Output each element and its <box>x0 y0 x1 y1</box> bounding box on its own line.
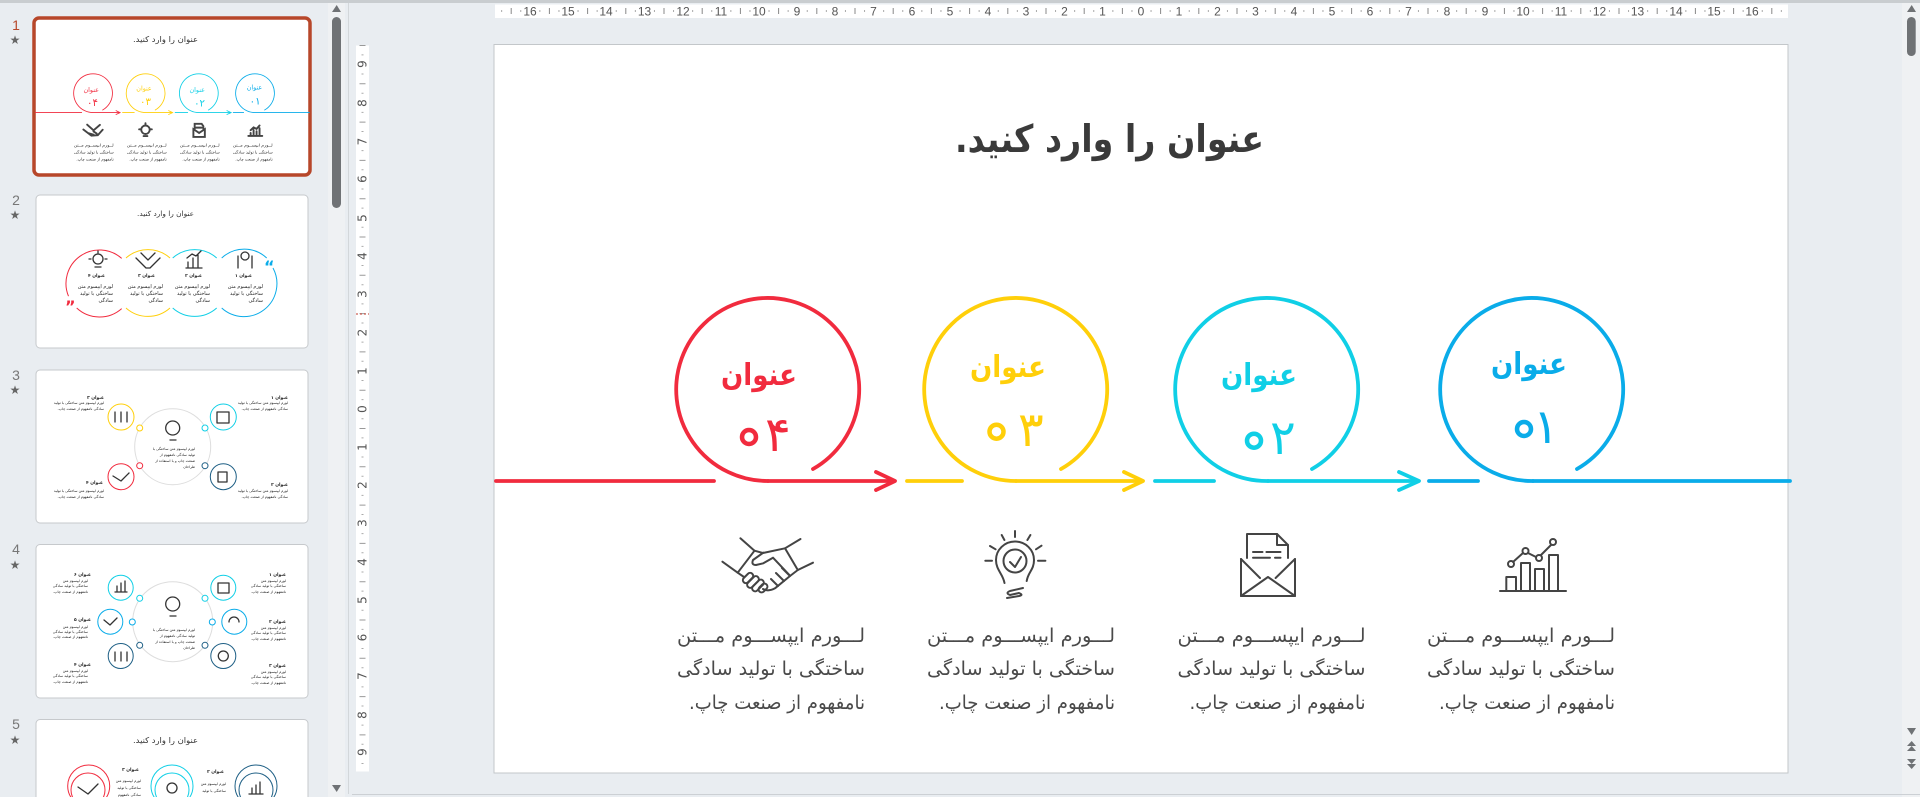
step 2 timeline: cyan circle and arrow <box>1155 298 1419 490</box>
thumbnail number and star 1: 1 <box>12 17 20 33</box>
thumbnail 5: لورم ایپسوم متن <box>116 779 141 784</box>
vertical ruler: 5 <box>356 596 370 604</box>
step 4 number: ۰۴ <box>742 407 791 463</box>
thumbnail 4: لورم ایپسوم متن <box>63 625 88 630</box>
panel: slide thumbnails <box>10 17 310 797</box>
thumbnail 1: ۰۲ <box>194 99 205 110</box>
horizontal ruler: 12 <box>1593 4 1606 18</box>
horizontal ruler: 1 <box>1176 4 1183 18</box>
thumbnail 3: سادگی نامفهوم از صنعت چاپ. <box>57 494 104 500</box>
step 1 heading: عنوان <box>1491 347 1567 382</box>
horizontal ruler: 12 <box>676 4 690 18</box>
step 2 heading: عنوان <box>1221 358 1297 393</box>
vertical ruler: 3 <box>356 519 370 527</box>
thumbnail 2: ” <box>65 297 76 316</box>
step 1 body text: لـــورم ایپســـوم مـــتن <box>1427 625 1615 647</box>
vertical ruler: 6 <box>356 175 370 183</box>
thumbnail 1: لــورم ایپســوم مــتن <box>127 142 167 147</box>
horizontal ruler: 10 <box>1516 4 1530 18</box>
thumbnail 4: عنوان ۳ <box>269 663 286 669</box>
horizontal ruler: 16 <box>1745 4 1759 18</box>
thumbnail 3: عنوان ۴ <box>86 481 103 486</box>
step 3 timeline: yellow circle and arrow <box>907 298 1143 490</box>
step 1 number: ۰۱ <box>1517 399 1559 455</box>
horizontal ruler: 3 <box>1023 4 1030 18</box>
vertical ruler: 9 <box>356 60 370 68</box>
thumbnail 1: نامفهوم از صنعت چاپ. <box>235 156 273 161</box>
thumbnail 1: عنوان را وارد کنید. <box>133 35 198 44</box>
thumbnail 1: ۰۱ <box>250 96 261 107</box>
thumbnail number and star 2: ★ <box>10 208 20 222</box>
vertical ruler: 3 <box>356 290 370 298</box>
thumbnail 1: لــورم ایپســوم مــتن <box>74 142 114 147</box>
thumbnail 4: نامفهوم از صنعت چاپ. <box>53 590 88 595</box>
thumbnail 2: لورم ایپسوم متن <box>128 284 163 290</box>
thumbnail 4: نامفهوم از صنعت چاپ. <box>53 635 88 640</box>
thumbnail 3: عنوان ۳ <box>87 395 104 401</box>
thumbnail 4: طراحان <box>183 646 195 650</box>
thumbnail 1: ساختگی با تولید سادگی <box>74 149 114 154</box>
thumbnail number and star 3 <box>10 367 20 397</box>
step 4 body text: لـــورم ایپســـوم مـــتن <box>677 625 865 647</box>
horizontal ruler: 14 <box>599 4 613 18</box>
step 3 body text: ساختگی با تولید سادگی <box>927 657 1115 680</box>
thumbnail 3: عنوان ۲ <box>271 483 288 488</box>
thumbnail 2: عنوان ۲ <box>185 274 202 279</box>
horizontal ruler: 13 <box>638 4 651 18</box>
thumbnail 2: لورم ایپسوم متن <box>175 284 210 290</box>
thumbnail 4: نامفهوم از صنعت چاپ. <box>251 681 286 686</box>
thumbnail 1: عنوان <box>136 85 152 92</box>
thumbnail 5: ساختگی با تولید <box>117 785 141 790</box>
thumbnail 4: ساختگی با تولید سادگی <box>53 629 88 634</box>
step 3 heading: عنوان <box>970 350 1046 385</box>
thumbnail 4: عنوان ۶ <box>74 573 91 578</box>
thumbnail 4: ساختگی با تولید سادگی <box>251 583 286 588</box>
thumbnail 4: تولید سادگی نامفهوم از <box>159 633 195 639</box>
thumbnail 4: لورم ایپسوم متن <box>261 670 286 675</box>
thumbnail 2: سادگی <box>98 297 113 304</box>
horizontal ruler: 2 <box>1061 4 1068 18</box>
vertical ruler: 9 <box>356 748 370 756</box>
thumbnail 1: ساختگی با تولید سادگی <box>233 149 273 154</box>
thumbnail 4: لورم ایپسوم متن <box>63 669 88 674</box>
horizontal ruler: 14 <box>1669 4 1683 18</box>
horizontal ruler: 7 <box>870 4 877 18</box>
thumbnail 3: لورم ایپسوم متن ساختگی با تولید <box>238 400 288 406</box>
icon: envelope with document <box>1241 534 1295 596</box>
vertical ruler: 0 <box>356 405 370 413</box>
thumbnail 2 <box>36 195 308 348</box>
thumbnail 4: نامفهوم از صنعت چاپ. <box>53 680 88 685</box>
thumbnail 4: عنوان ۲ <box>269 620 286 625</box>
thumbnail 5: عنوان را وارد کنید. <box>133 736 198 745</box>
thumbnail 5: عنوان ۳ <box>122 767 139 773</box>
thumbnail number and star 5: ★ <box>10 733 20 747</box>
thumbnail 3: لورم ایپسوم متن ساختگی با تولید <box>238 488 288 494</box>
thumbnail 4: ساختگی با تولید سادگی <box>251 630 286 635</box>
horizontal ruler: 5 <box>947 4 954 18</box>
thumbnail number and star 5 <box>10 716 20 747</box>
vertical ruler: 8 <box>356 711 370 719</box>
step 2 body text: نامفهوم از صنعت چاپ. <box>1190 692 1366 714</box>
thumbnail 3: سادگی نامفهوم از صنعت چاپ. <box>241 406 288 412</box>
thumbnail 1: لــورم ایپســوم مــتن <box>233 142 273 147</box>
step 3 body text: لـــورم ایپســـوم مـــتن <box>927 625 1115 647</box>
horizontal ruler: 1 <box>1099 4 1106 18</box>
thumbnail 4: لورم ایپسوم متن <box>63 579 88 584</box>
horizontal ruler: 8 <box>832 4 839 18</box>
vertical ruler: 5 <box>356 214 370 222</box>
step 3 number: ۰۳ <box>989 402 1044 458</box>
horizontal ruler: 9 <box>1482 4 1489 18</box>
icon: handshake <box>722 538 813 594</box>
step 1 timeline: blue circle and line <box>1429 298 1790 481</box>
vertical ruler: 2 <box>356 329 370 336</box>
thumbnail number and star 1: ★ <box>10 33 20 47</box>
thumbnail 2: عنوان ۳ <box>138 273 155 279</box>
thumbnail number and star 2 <box>10 192 20 222</box>
thumbnail 2: سادگی <box>196 297 210 304</box>
horizontal ruler: 15 <box>1707 4 1721 18</box>
thumbnail number and star 5: 5 <box>12 716 20 732</box>
horizontal ruler: 16 <box>523 4 537 18</box>
step 3 body text: نامفهوم از صنعت چاپ. <box>939 692 1115 714</box>
panel: main slide <box>494 44 1790 773</box>
thumbnail 1: ساختگی با تولید سادگی <box>127 149 167 154</box>
thumbnail 1: ۰۴ <box>87 98 98 109</box>
thumbnail 2: لورم ایپسوم متن <box>78 284 113 290</box>
thumbnail 1: ساختگی با تولید سادگی <box>180 149 220 154</box>
thumbnail 1: عنوان <box>189 87 205 94</box>
thumbnail 1: لــورم ایپســوم مــتن <box>180 142 220 147</box>
thumbnail 4: لورم ایپسوم متن <box>261 579 286 584</box>
thumbnail 2: عنوان ۴ <box>88 274 105 279</box>
thumbnail number and star 1 <box>10 17 20 47</box>
right scrollbar <box>1907 5 1916 769</box>
step 2 body text: ساختگی با تولید سادگی <box>1178 657 1366 680</box>
thumbnail 4: عنوان ۱ <box>269 573 286 578</box>
thumbnail 3: طراحان <box>183 465 195 469</box>
step 4 timeline: red circle and arrow <box>496 298 895 490</box>
thumbnail 3 <box>36 370 308 523</box>
thumbnail 4: لورم ایپسوم متن ساختگی با <box>153 627 195 633</box>
horizontal ruler: 4 <box>1291 4 1298 18</box>
thumbnail 5: لورم ایپسوم متن <box>201 782 226 787</box>
icon: bar and line chart <box>1500 539 1566 591</box>
horizontal ruler: 2 <box>1214 4 1221 18</box>
thumbnail 4: لورم ایپسوم متن <box>261 626 286 631</box>
thumbnail 4: ساختگی با تولید سادگی <box>53 583 88 588</box>
vertical ruler: 2 <box>356 481 370 489</box>
thumbnail number and star 4 <box>10 541 20 572</box>
step 4 body text: ساختگی با تولید سادگی <box>677 657 865 680</box>
horizontal ruler: 0 <box>1138 4 1145 18</box>
vertical ruler: 7 <box>356 672 370 680</box>
horizontal ruler: 3 <box>1252 4 1259 18</box>
horizontal ruler: 15 <box>561 4 575 18</box>
thumbnail 2: عنوان ۱ <box>235 274 252 279</box>
step 4 heading: عنوان <box>721 358 797 393</box>
thumbnail number and star 3: ★ <box>10 383 20 397</box>
step 2 body text: لـــورم ایپســـوم مـــتن <box>1178 625 1366 647</box>
thumbnail 3: عنوان ۱ <box>271 396 288 401</box>
step 2 number: ۰۲ <box>1247 410 1296 466</box>
vertical ruler: 4 <box>356 558 370 566</box>
thumbnail number and star 3: 3 <box>12 367 20 383</box>
vertical ruler: 4 <box>356 252 370 260</box>
thumbnail 2: سادگی <box>148 297 163 304</box>
title: عنوان را وارد کنید. <box>955 117 1264 162</box>
horizontal ruler: 4 <box>985 4 992 18</box>
thumbnail 1: نامفهوم از صنعت چاپ. <box>129 156 167 161</box>
thumbnail 2: ساختگی با تولید <box>130 290 163 297</box>
thumbnail 2: ساختگی با تولید <box>177 290 210 297</box>
thumbnail 3: تولید سادگی نامفهوم از <box>159 452 195 458</box>
thumbnail 2: لورم ایپسوم متن <box>228 284 263 290</box>
step 1 body text <box>1427 625 1615 714</box>
thumbnail 1: عنوان <box>83 87 99 94</box>
left scrollbar <box>332 5 341 792</box>
icon: light bulb <box>985 531 1045 598</box>
thumbnail 4: نامفهوم از صنعت چاپ. <box>251 637 286 642</box>
thumbnail 4: عنوان ۴ <box>74 663 91 668</box>
thumbnail 4 <box>36 544 308 698</box>
thumbnail number and star 4: 4 <box>12 541 20 557</box>
horizontal ruler: 6 <box>909 4 916 18</box>
horizontal ruler: 11 <box>1555 4 1568 18</box>
thumbnail 4: نامفهوم از صنعت چاپ. <box>251 590 286 595</box>
horizontal ruler: 5 <box>1329 4 1336 18</box>
thumbnail 3: صنعت چاپ و با استفاده از <box>154 459 195 463</box>
thumbnail 1: عنوان <box>247 85 262 92</box>
thumbnail 1: نامفهوم از صنعت چاپ. <box>182 156 220 161</box>
thumbnail 1: ۰۳ <box>140 97 151 108</box>
thumbnail 4: صنعت چاپ و با استفاده از <box>154 640 195 644</box>
vertical ruler: 8 <box>356 99 370 107</box>
thumbnail 2: سادگی <box>248 297 263 304</box>
thumbnail 2: ساختگی با تولید <box>80 290 113 297</box>
thumbnail 5 <box>36 720 308 797</box>
vertical ruler: 1 <box>356 443 370 451</box>
thumbnail 3: سادگی نامفهوم از صنعت چاپ. <box>241 494 288 500</box>
horizontal ruler: 10 <box>752 4 766 18</box>
horizontal ruler <box>495 4 1788 18</box>
horizontal ruler: 13 <box>1631 4 1644 18</box>
thumbnail 5: عنوان ۲ <box>207 770 224 775</box>
horizontal ruler: 7 <box>1405 4 1412 18</box>
horizontal ruler: 8 <box>1444 4 1451 18</box>
step 1 body text: نامفهوم از صنعت چاپ. <box>1439 692 1615 714</box>
vertical ruler <box>356 45 370 772</box>
thumbnail number and star 4: ★ <box>10 558 20 572</box>
vertical ruler: 7 <box>356 138 370 145</box>
thumbnail number and star 2: 2 <box>12 192 20 208</box>
horizontal ruler: 9 <box>794 4 801 18</box>
step 3 body text <box>927 625 1115 714</box>
vertical ruler: 1 <box>356 367 370 375</box>
thumbnail 5: ساختگی با تولید <box>202 788 226 793</box>
thumbnail 3: لورم ایپسوم متن ساختگی با <box>153 446 195 452</box>
horizontal ruler: 11 <box>715 4 728 18</box>
thumbnail 2: عنوان را وارد کنید. <box>137 210 194 218</box>
thumbnail 1: نامفهوم از صنعت چاپ. <box>76 156 114 161</box>
thumbnail 3: لورم ایپسوم متن ساختگی با تولید <box>54 400 104 406</box>
step 4 body text: نامفهوم از صنعت چاپ. <box>689 692 865 714</box>
horizontal ruler: 6 <box>1367 4 1374 18</box>
vertical ruler: 6 <box>356 634 370 641</box>
thumbnail 2: “ <box>264 257 275 276</box>
thumbnail 3: سادگی نامفهوم از صنعت چاپ. <box>57 406 104 412</box>
step 2 body text <box>1178 625 1366 714</box>
step 1 body text: ساختگی با تولید سادگی <box>1427 657 1615 680</box>
thumbnail 4: ساختگی با تولید سادگی <box>53 673 88 678</box>
thumbnail 4: ساختگی با تولید سادگی <box>251 674 286 679</box>
step 4 body text <box>677 625 865 714</box>
thumbnail 1 <box>34 18 310 175</box>
thumbnail 2: ساختگی با تولید <box>230 290 263 297</box>
thumbnail 3: لورم ایپسوم متن ساختگی با تولید <box>54 488 104 494</box>
thumbnail 4: عنوان ۵ <box>74 618 91 623</box>
thumbnail 5: سادگی نامفهوم <box>118 792 141 797</box>
